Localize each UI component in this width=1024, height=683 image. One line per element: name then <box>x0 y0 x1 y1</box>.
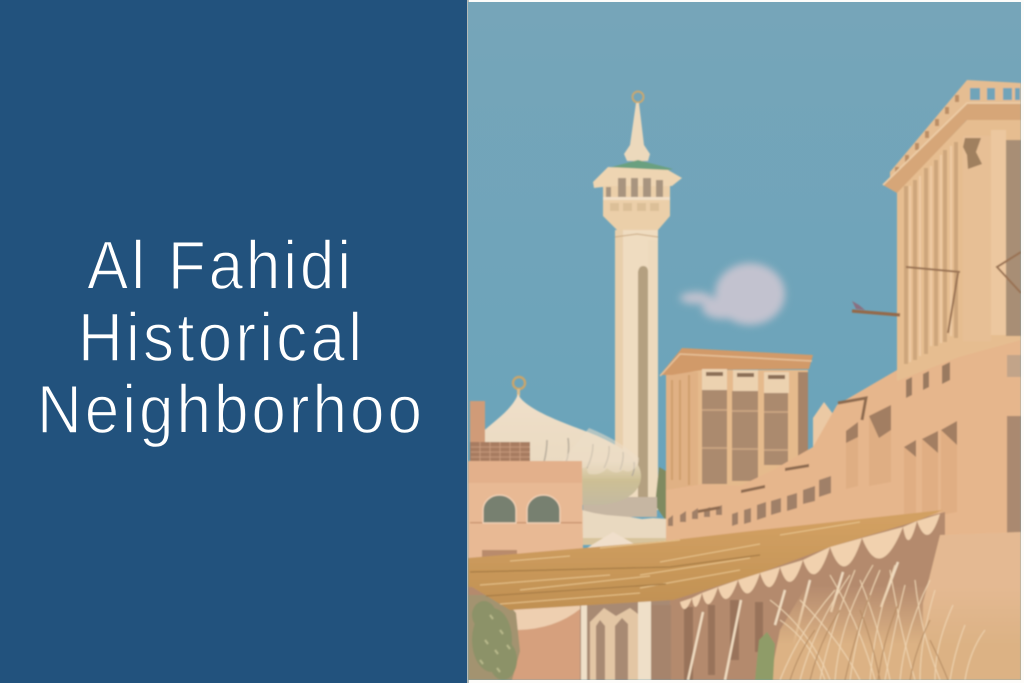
awning <box>468 510 943 610</box>
tower dark window <box>1006 140 1021 336</box>
tower poles <box>906 252 1021 333</box>
tower body <box>897 120 1021 381</box>
centre arcade <box>580 600 671 680</box>
big corner plinth <box>923 532 1021 680</box>
small green plant <box>755 632 775 680</box>
wall window row <box>668 464 831 526</box>
tower cornice <box>883 103 1021 193</box>
awning scallops <box>680 514 940 609</box>
small white tent <box>587 533 634 548</box>
dome petals <box>544 438 634 476</box>
cloud <box>680 263 785 325</box>
mid wind tower <box>660 348 813 502</box>
tower body <box>691 369 809 487</box>
small roof turret <box>812 402 833 447</box>
lower left wall <box>468 600 580 680</box>
photo left edge <box>467 0 469 683</box>
title <box>37 227 422 448</box>
right long wall <box>665 339 1021 542</box>
dome body <box>478 394 641 505</box>
sky <box>468 2 1021 680</box>
wall <box>468 482 584 559</box>
tower column <box>963 136 991 341</box>
left building <box>468 401 583 574</box>
tower ornament <box>963 138 982 169</box>
white lower dome cornice <box>581 510 670 545</box>
main wind tower <box>883 80 1021 381</box>
minaret crescent <box>632 92 644 102</box>
minaret eave <box>593 167 682 188</box>
chimney <box>470 401 485 443</box>
tower parapet <box>890 80 1021 180</box>
tower louvres <box>702 369 789 484</box>
panel: title background <box>0 0 467 683</box>
tower strut columns <box>906 142 956 364</box>
shrub <box>468 595 520 680</box>
minaret spire <box>624 103 650 161</box>
minaret green roof <box>612 159 672 170</box>
wooden poles under awning <box>688 562 898 680</box>
pole on wall <box>838 398 866 420</box>
title: Al Fahidi <box>87 227 351 304</box>
lattice parapet <box>470 442 530 461</box>
tower shadow side <box>666 373 696 488</box>
arched windows <box>483 495 516 523</box>
panel: photograph of the historic district <box>468 2 1021 680</box>
title: Historical <box>78 299 362 376</box>
minaret shaft <box>622 229 659 498</box>
wall recesses <box>846 355 1021 534</box>
tower roof <box>660 348 813 375</box>
shaded wall below awning <box>468 512 945 680</box>
dry grass <box>770 550 1021 680</box>
dome <box>478 377 641 505</box>
small lattice <box>482 550 517 559</box>
perch pole with bird <box>852 301 900 315</box>
minaret balcony <box>603 186 670 230</box>
title: Neighborhoo <box>37 371 422 448</box>
green tree behind the tower <box>655 467 666 521</box>
dome crescent <box>513 377 525 389</box>
minaret <box>593 92 682 510</box>
grey terrace below the dome <box>583 497 657 517</box>
